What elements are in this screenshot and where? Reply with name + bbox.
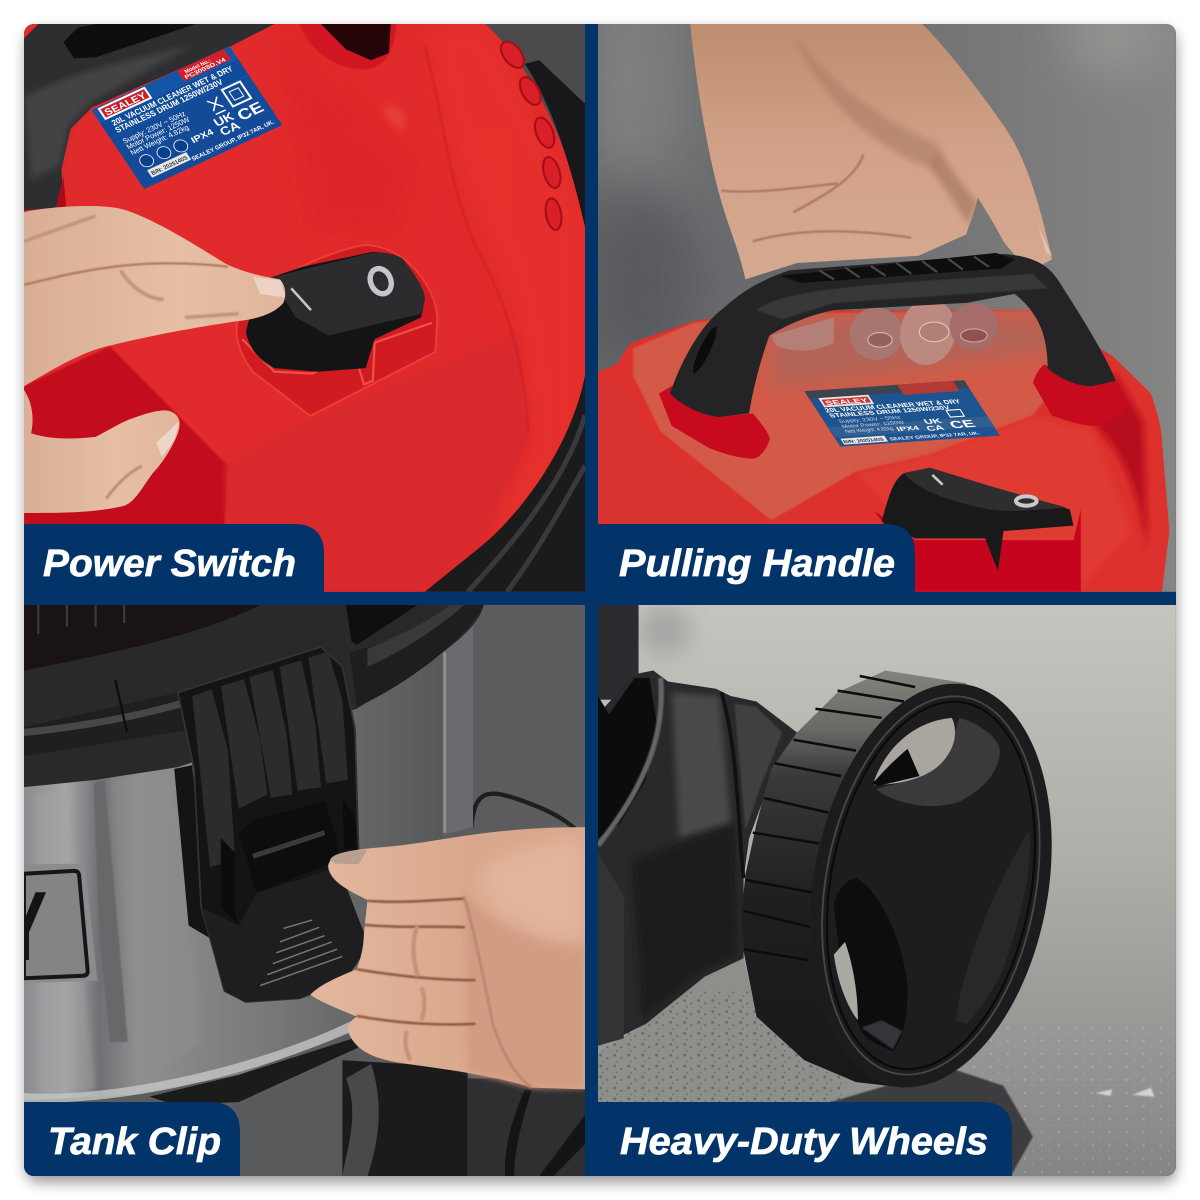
upper cutout — [876, 718, 1000, 806]
panel: tank clip photo — [1, 605, 585, 1176]
product label on power switch panel: Nett Weight: 4.82kg — [128, 123, 191, 157]
label: pulling handle: Pulling Handle — [619, 543, 895, 585]
upright tube — [598, 605, 639, 700]
product label on pulling handle panel: CE — [947, 417, 978, 431]
lower left recess — [834, 878, 908, 1051]
product label on power switch panel: SEALEY GROUP, IP32 7AR, UK. — [191, 120, 276, 163]
rocker switch — [882, 468, 1073, 571]
red vacuum body — [24, 24, 585, 592]
product label on pulling handle panel: Supply: 230V ~ 50Hz — [837, 415, 903, 425]
switch marks — [291, 265, 395, 310]
label: heavy-duty wheels: Heavy-Duty Wheels — [620, 1121, 988, 1163]
product label on pulling handle panel: SEALEY GROUP, IP32 7AR, UK. — [888, 431, 982, 442]
rim ridges — [468, 415, 585, 592]
panel: pulling handle photo — [583, 0, 1176, 592]
product label on power switch panel: IPX4 — [189, 127, 215, 145]
switch recess — [237, 245, 437, 416]
top right background — [486, 24, 585, 227]
label: power switch: Power Switch — [43, 543, 296, 585]
hand — [690, 24, 1052, 279]
background shading — [583, 0, 1162, 379]
switch marks — [932, 475, 1037, 506]
product label on pulling handle panel: CA — [924, 424, 946, 433]
handle grip — [63, 24, 196, 58]
clip lever — [201, 867, 364, 1002]
product label on pulling handle panel — [804, 380, 1001, 447]
product label on power switch panel: CA — [217, 118, 243, 139]
product label on power switch panel: Supply: 230V ~ 50Hz — [121, 109, 188, 145]
product label on power switch panel: Motor Power: 1250W — [125, 115, 192, 151]
clip latch mechanism — [239, 802, 339, 893]
wheel tread — [742, 671, 1003, 1088]
product label on power switch panel: 20L VACUUM CLEANER WET & DRY — [109, 64, 235, 128]
label: power switch — [24, 524, 324, 592]
product label on power switch panel: SEALEY — [103, 91, 149, 118]
product label on power switch panel — [91, 46, 282, 189]
fingers under handle — [771, 302, 998, 365]
divider: vertical — [585, 24, 598, 1176]
handle bases — [659, 386, 770, 459]
panel: power switch photo — [24, 24, 585, 592]
product label on pulling handle panel: Nett Weight: 4.82kg — [844, 426, 895, 435]
rocker switch — [246, 252, 425, 372]
body shading — [24, 24, 585, 592]
power cable — [472, 792, 576, 828]
product label on pulling handle panel: 20L VACUUM CLEANER WET & DRY — [824, 399, 963, 414]
product label on pulling handle panel: B/N: 2025140S — [842, 437, 886, 445]
product label on pulling handle panel: SEALEY — [824, 398, 870, 407]
black lid rim — [24, 605, 484, 787]
steel drum — [24, 701, 370, 1100]
product label on power switch panel: CE — [234, 99, 268, 124]
hand on clip — [310, 827, 585, 1089]
black carry handle — [670, 253, 1116, 417]
black clip — [174, 647, 364, 1002]
right recess — [956, 831, 1030, 1024]
product label on power switch panel: UK — [211, 109, 237, 130]
divider: horizontal — [24, 592, 1176, 605]
body top plane — [633, 310, 1085, 520]
switch housing — [874, 509, 1081, 592]
label: tank clip: Tank Clip — [48, 1121, 221, 1163]
handle slot — [300, 24, 396, 69]
label: pulling handle — [598, 524, 915, 592]
product label on power switch panel: STAINLESS DRUM 1250W/230V — [113, 77, 225, 135]
product label on power switch panel: B/N: 2025140S — [151, 155, 189, 177]
product label on power switch panel: Model No.: — [184, 58, 213, 75]
product label on pulling handle panel: Motor Power: 1250W — [841, 420, 907, 430]
product label on pulling handle panel: UK — [922, 417, 944, 426]
floor reflections — [598, 605, 1176, 1176]
black lower rim — [425, 375, 585, 592]
hose body — [598, 671, 797, 1046]
red body — [598, 310, 1169, 592]
product label on pulling handle panel: IPX4 — [895, 425, 921, 433]
hand on switch — [24, 206, 285, 513]
label: heavy-duty wheels — [598, 1102, 1012, 1176]
black carry handle — [24, 24, 274, 211]
label: tank clip — [24, 1102, 240, 1176]
product label on pulling handle panel: STAINLESS DRUM 1250W/230V — [828, 405, 952, 419]
lower area — [342, 1060, 585, 1176]
wheel face — [780, 664, 1082, 1106]
vent dots — [496, 37, 564, 231]
panel: wheels photo — [598, 605, 1176, 1176]
ribbed black vent band — [525, 60, 585, 227]
product label on power switch panel: PC300SD.V4 — [184, 57, 228, 81]
pillar — [443, 623, 473, 834]
sticker on drum — [24, 864, 98, 982]
sticker on drum: Y — [1, 872, 47, 982]
chrome base edge — [24, 1020, 359, 1105]
